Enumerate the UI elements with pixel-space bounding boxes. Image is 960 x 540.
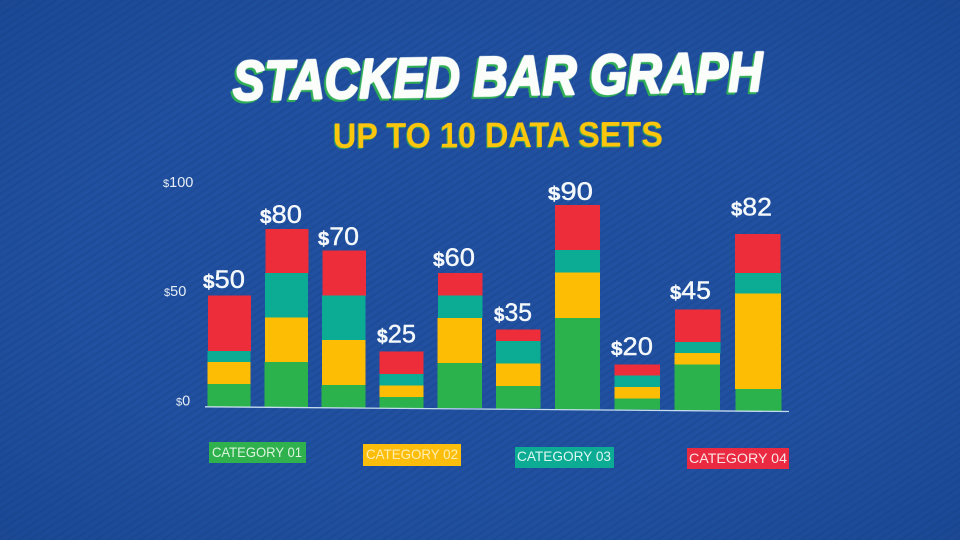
subtitle: UP TO 10 DATA SETS [333, 115, 663, 156]
value labels [203, 178, 772, 361]
bar: $82 [735, 234, 782, 411]
value labels: $80 [260, 201, 302, 229]
legend [209, 442, 789, 469]
stacked bar chart [208, 205, 782, 411]
value labels: $45 [670, 277, 711, 305]
bar: $80 [264, 229, 308, 407]
bar: $90 [555, 205, 600, 410]
bar: $45 [674, 310, 720, 410]
title: STACKED BAR GRAPH [232, 40, 764, 112]
bar: $70 [322, 250, 366, 408]
bar: $60 [438, 273, 482, 408]
bar: $35 [496, 330, 540, 408]
legend: category 04: CATEGORY 04 [689, 450, 787, 466]
value labels: $25 [377, 320, 416, 348]
value labels: $35 [494, 299, 532, 327]
bar: $50 [208, 296, 251, 407]
bar: $25 [380, 352, 424, 408]
y axis labels: $100 [163, 175, 193, 191]
value labels: $50 [203, 266, 245, 294]
legend: category 01: CATEGORY 01 [212, 444, 302, 460]
value labels: $82 [731, 194, 772, 222]
bar: $20 [614, 364, 660, 410]
legend: category 02 [363, 444, 461, 466]
value labels: $70 [318, 223, 359, 251]
value labels: $20 [611, 333, 653, 361]
value labels: $90 [548, 178, 593, 206]
legend: category 03: CATEGORY 03 [517, 448, 611, 464]
value labels: $60 [433, 244, 475, 272]
y axis labels: $0 [176, 394, 190, 410]
legend: category 02: CATEGORY 02 [366, 446, 458, 462]
x axis line [205, 407, 789, 412]
y axis labels: $50 [164, 284, 186, 300]
y axis labels [163, 175, 193, 410]
